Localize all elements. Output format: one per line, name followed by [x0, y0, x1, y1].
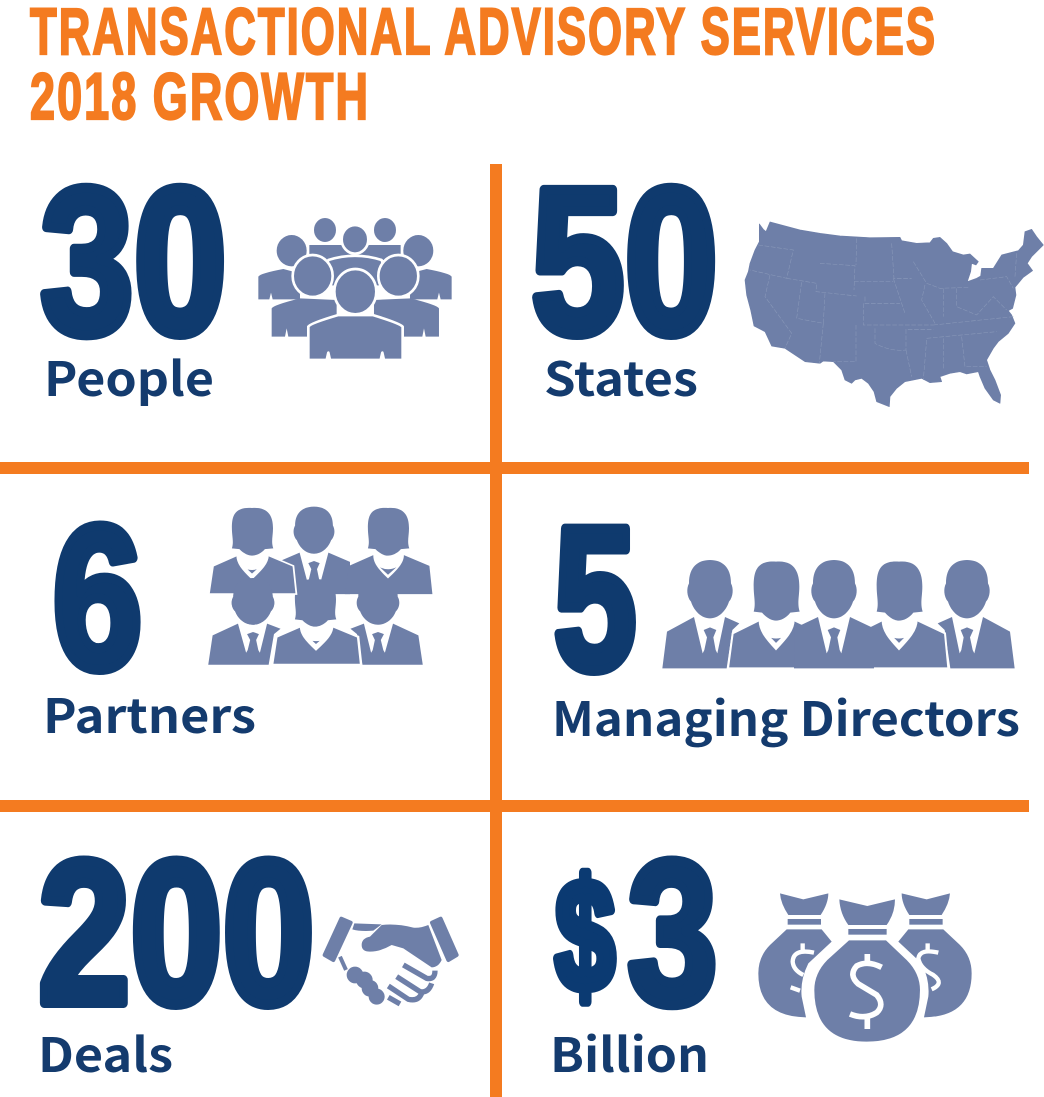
icon: six partners: [208, 507, 432, 665]
number: 200: 200: [38, 819, 315, 1047]
icon: handshake: [325, 919, 457, 1005]
icon: group of people: [258, 217, 452, 360]
number: 30: 30: [40, 146, 227, 378]
title: 2018 GROWTH: [30, 59, 370, 133]
label: Managing Directors: Managing Directors: [552, 681, 1020, 750]
icon: five directors: [662, 560, 1015, 668]
label: People: People: [44, 341, 214, 410]
panel: states: [531, 146, 1043, 410]
panel: deals: [38, 819, 457, 1086]
title: [30, 0, 937, 133]
panel: people: [40, 146, 452, 410]
number: 50: 50: [531, 146, 718, 378]
label: Partners: Partners: [43, 678, 256, 747]
icon: US map: [745, 222, 1043, 407]
icon: money bags: [758, 893, 972, 1042]
label: States: States: [544, 341, 698, 410]
number: $3: 3: [628, 819, 718, 1047]
panel: partners: [43, 484, 432, 747]
label: Deals: Deals: [38, 1017, 173, 1086]
number: $3: [555, 819, 718, 1047]
label: Billion: Billion: [550, 1017, 709, 1086]
panel: billion: [550, 819, 972, 1086]
number: 6: 6: [52, 484, 142, 712]
number: 5: 5: [554, 485, 636, 713]
panel: managing directors: [552, 485, 1020, 750]
number: $3: $: [555, 848, 615, 1024]
